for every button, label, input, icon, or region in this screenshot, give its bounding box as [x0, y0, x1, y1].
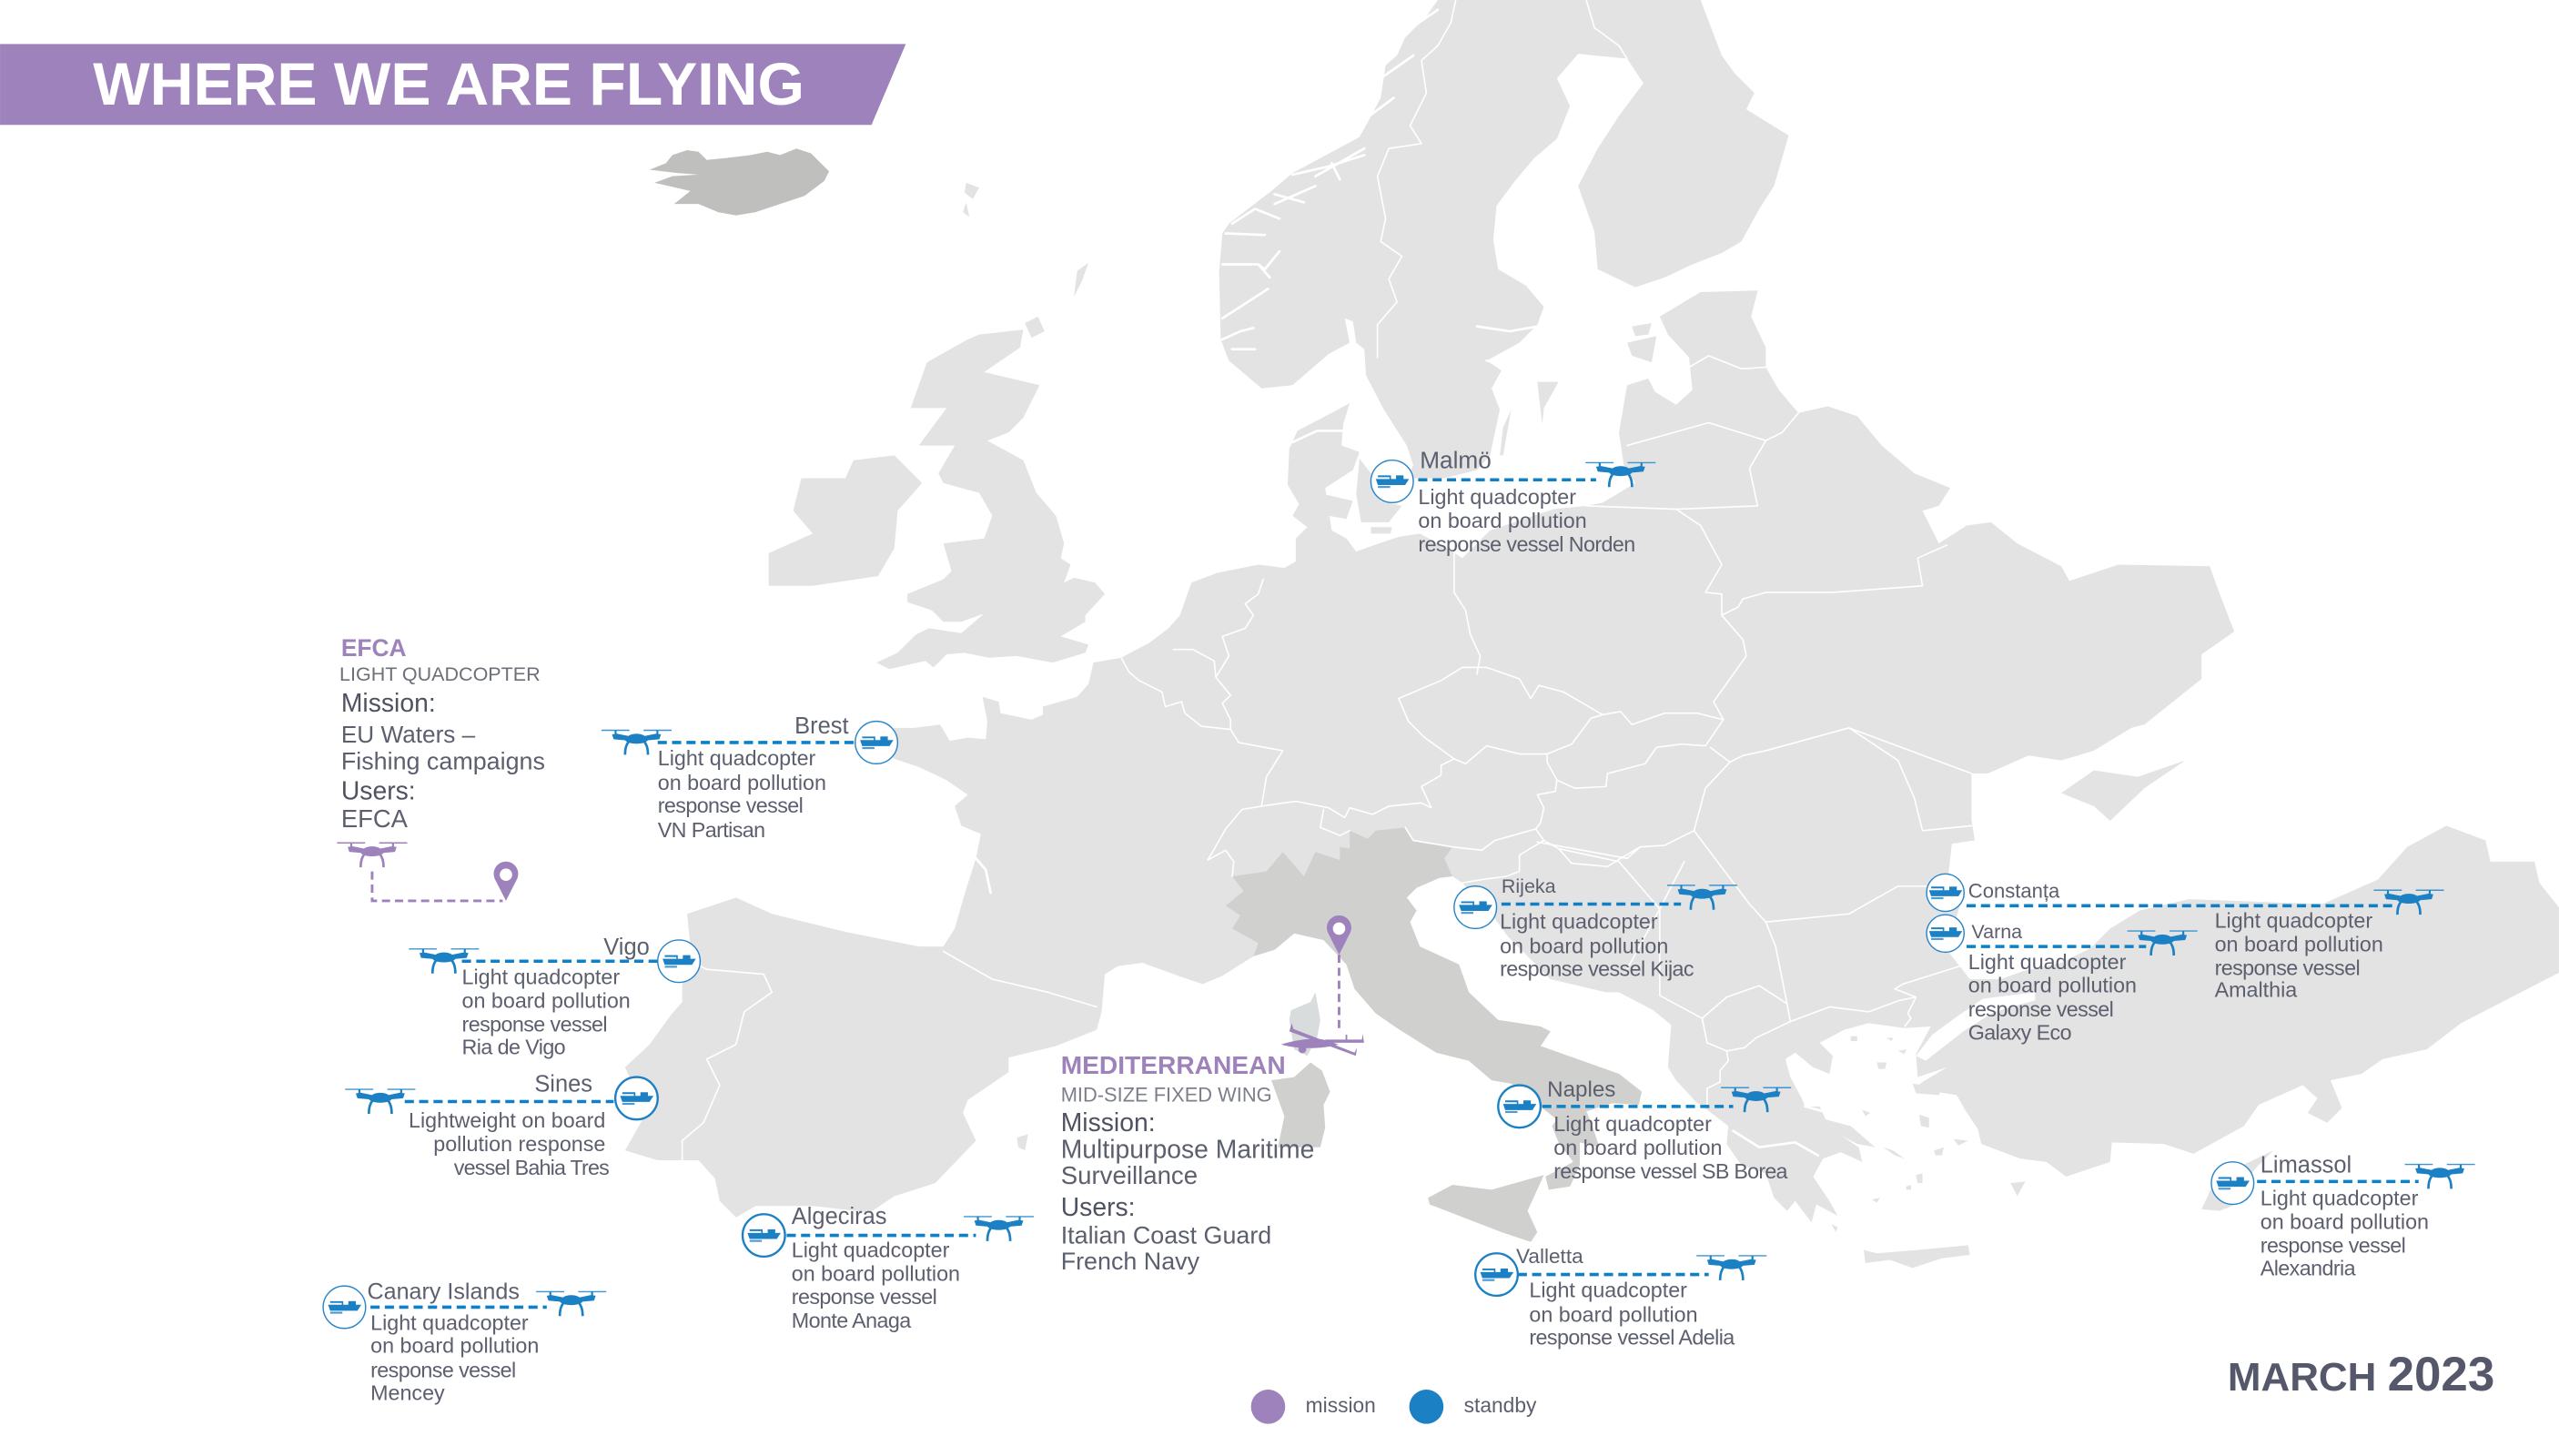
callout: Algeciras: response vessel — [792, 1285, 936, 1309]
panel: EFCA mission — [337, 634, 545, 901]
Italy — [1226, 827, 1642, 1189]
callout: Rijeka: Rijeka — [1502, 875, 1556, 897]
callout: Canary Islands: Canary Islands — [368, 1279, 520, 1304]
callout: Sines — [345, 1072, 658, 1179]
callout: Valletta: Valletta — [1516, 1245, 1583, 1268]
callout: Varna: response vessel — [1968, 997, 2113, 1021]
callout: Varna — [1927, 915, 2198, 1044]
mission details: EFCA — [341, 804, 409, 833]
callout: Algeciras: on board pollution — [792, 1262, 960, 1286]
route: drone to pin — [372, 872, 502, 901]
callout: Naples: response vessel SB Borea — [1553, 1159, 1788, 1183]
legend: standby — [1410, 1390, 1537, 1424]
landmass: Iceland — [650, 148, 829, 216]
callout: Naples: on board pollution — [1553, 1136, 1723, 1159]
mission details: Multipurpose Maritime — [1061, 1135, 1314, 1164]
landmass: Great Britain — [876, 329, 1105, 669]
legend — [1251, 1390, 1537, 1424]
callout: Algeciras: Algeciras — [792, 1204, 886, 1229]
callout: Constanța — [1927, 874, 2444, 1002]
callout: Brest — [602, 713, 897, 842]
callout: Naples — [1498, 1077, 1791, 1183]
callout: Limassol: on board pollution — [2261, 1209, 2429, 1233]
heading: EFCA: EFCA — [341, 634, 407, 662]
callout: Vigo: Light quadcopter — [462, 965, 620, 988]
callout: Constanța: Amalthia — [2215, 978, 2297, 1002]
title: WHERE WE ARE FLYING — [93, 51, 804, 118]
callout: Vigo — [409, 935, 700, 1058]
callout: Limassol: Light quadcopter — [2261, 1186, 2419, 1209]
icon: fixed-wing aircraft — [1281, 1023, 1364, 1056]
icon: map pin — [494, 862, 518, 901]
callout: Sines: pollution response — [433, 1132, 605, 1156]
fjords, inlets and gulfs — [976, 10, 1829, 1156]
mission details: Italian Coast Guard — [1061, 1222, 1271, 1249]
callout: Algeciras — [743, 1204, 1034, 1332]
callout: Rijeka: Light quadcopter — [1500, 909, 1658, 933]
mission details: EU Waters – — [341, 721, 476, 748]
icon: map pin — [1327, 915, 1351, 955]
callout: Canary Islands: on board pollution — [370, 1334, 539, 1358]
callout: Malmö: response vessel Norden — [1418, 532, 1635, 556]
callout: Varna: Galaxy Eco — [1968, 1020, 2071, 1044]
mission details: French Navy — [1061, 1248, 1200, 1275]
mission details: Fishing campaigns — [341, 748, 545, 775]
callout: Constanța: response vessel — [2215, 956, 2360, 980]
callout: Sines: vessel Bahia Tres — [454, 1156, 609, 1179]
landmass: Ireland — [769, 455, 922, 586]
mission details: Users: — [1061, 1193, 1136, 1222]
callout: Varna: Light quadcopter — [1968, 950, 2127, 974]
callout: Varna: on board pollution — [1968, 973, 2137, 996]
callout: Brest: response vessel — [658, 794, 803, 817]
Sardinia — [1271, 1062, 1330, 1148]
callout: Algeciras: Light quadcopter — [792, 1239, 950, 1262]
callout: Algeciras: Monte Anaga — [792, 1309, 911, 1332]
callout: Valletta: Light quadcopter — [1529, 1279, 1687, 1302]
country borders — [683, 0, 1971, 1160]
subheading: MID-SIZE FIXED WING — [1061, 1083, 1272, 1106]
callout: Valletta: on board pollution — [1529, 1303, 1698, 1327]
callout: Constanța: on board pollution — [2215, 933, 2383, 956]
Sicily — [1428, 1175, 1544, 1242]
callout: Limassol — [2211, 1153, 2475, 1279]
callout: Sines: Lightweight on board — [409, 1108, 605, 1132]
callout: Constanța: Constanța — [1968, 879, 2060, 902]
callout: Vigo: Ria de Vigo — [462, 1035, 565, 1058]
mission details: Mission: — [1061, 1108, 1156, 1138]
Corsica — [1290, 992, 1320, 1056]
callout: Constanța: Light quadcopter — [2215, 909, 2372, 933]
legend: mission: mission — [1306, 1393, 1376, 1417]
callout: Brest: on board pollution — [658, 771, 826, 794]
mission details: Surveillance — [1061, 1161, 1198, 1189]
callout: Rijeka — [1454, 875, 1737, 980]
route: pin to aircraft — [1338, 955, 1340, 1031]
callout: Sines: Sines — [534, 1072, 592, 1097]
banner — [0, 44, 905, 125]
Sea of Marmara — [1916, 992, 2035, 1061]
callout: Canary Islands: Light quadcopter — [370, 1311, 529, 1335]
legend: standby: standby — [1464, 1393, 1537, 1417]
callout: Limassol: response vessel — [2261, 1233, 2405, 1257]
callout: Malmö — [1371, 447, 1655, 556]
callout: Vigo: response vessel — [462, 1012, 607, 1036]
callout: Brest: Brest — [794, 713, 849, 739]
banner shape — [0, 44, 905, 125]
date: MARCH 2023 — [2228, 1348, 2494, 1401]
mission details: Mission: — [341, 689, 436, 718]
subheading: LIGHT QUADCOPTER — [339, 663, 541, 685]
mission details: Users: — [341, 777, 416, 806]
mission details — [1061, 1108, 1314, 1275]
icon: drone — [337, 843, 407, 867]
map of Europe — [625, 0, 2559, 1268]
callout: Canary Islands: Mencey — [370, 1381, 445, 1405]
callout: Brest: Light quadcopter — [658, 746, 816, 770]
callout: Rijeka: on board pollution — [1500, 934, 1668, 957]
callout: Canary Islands — [323, 1279, 606, 1405]
landmass: Scandinavia — [1219, 0, 1789, 478]
panel: Mediterranean mission — [1061, 915, 1364, 1275]
callout: Varna: Varna — [1971, 921, 2022, 943]
callout: Canary Islands: response vessel — [370, 1359, 516, 1382]
legend: mission — [1251, 1390, 1376, 1424]
callout: Malmö: Malmö — [1420, 447, 1492, 474]
callout: Rijeka: response vessel Kijac — [1500, 956, 1694, 980]
callout: Limassol: Alexandria — [2261, 1256, 2356, 1279]
heading: Mediterranean: MEDITERRANEAN — [1061, 1051, 1286, 1079]
callout: Naples: Light quadcopter — [1553, 1112, 1712, 1136]
callout: Malmö: Light quadcopter — [1418, 485, 1576, 509]
landmass: continental Europe and Turkey — [625, 290, 2559, 1222]
callout: Brest: VN Partisan — [658, 818, 765, 842]
callout: Vigo: on board pollution — [462, 988, 631, 1012]
callout: Malmö: on board pollution — [1418, 509, 1587, 532]
callout: Limassol: Limassol — [2261, 1153, 2352, 1178]
callout: Valletta: response vessel Adelia — [1529, 1326, 1735, 1350]
mission details — [341, 689, 545, 833]
callout: Valletta — [1475, 1245, 1766, 1350]
landmass: islands — [963, 183, 2273, 1268]
callout: Vigo: Vigo — [603, 935, 650, 960]
callout: Naples: Naples — [1547, 1077, 1615, 1102]
